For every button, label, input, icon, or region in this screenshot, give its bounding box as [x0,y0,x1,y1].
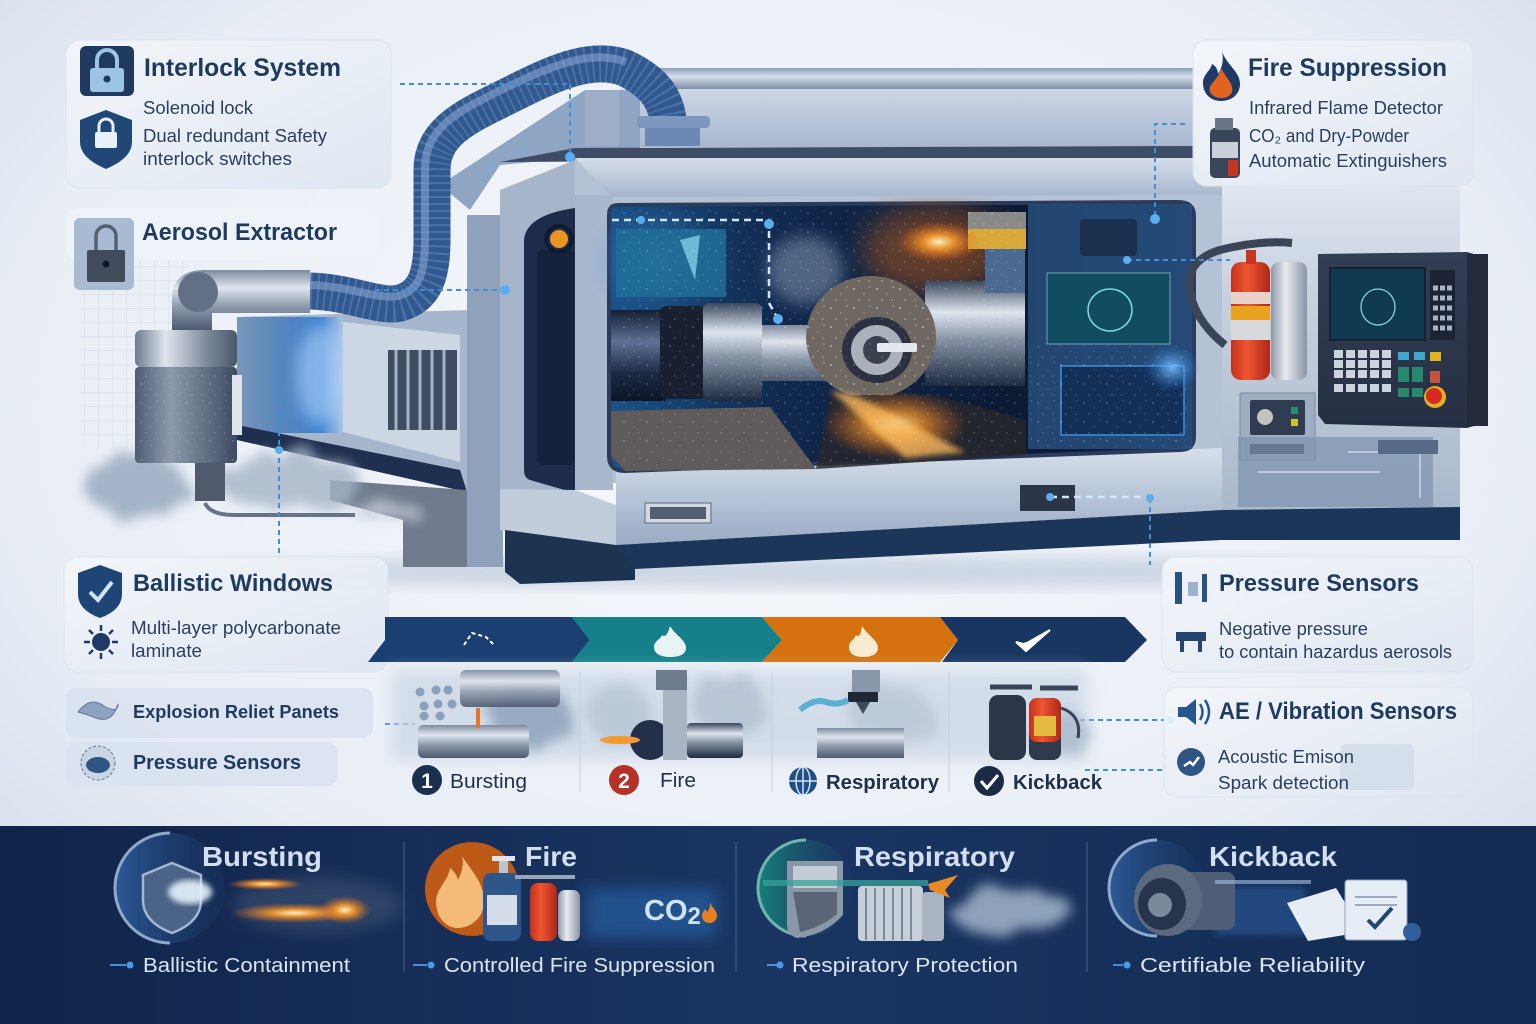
roof box [585,90,619,146]
extractor enclosure body [237,310,470,567]
arrow: dark navy [940,617,1147,662]
caption: Respiratory Protection [792,955,1018,977]
heading: Kickback [1209,841,1337,872]
machine [85,57,1488,588]
right cabinet [1215,186,1460,540]
label: fire [609,765,696,795]
icon: padlock [80,46,134,96]
shaft [762,325,840,381]
glow chart [585,888,717,938]
CO2 mark: CO [644,895,688,927]
icon: flame [1203,52,1240,101]
viewing window [585,200,1200,471]
rear shaft [925,281,1025,386]
lower sparks [823,391,967,459]
slanted roof [440,90,640,210]
smoke near extractor [85,453,421,522]
text: laminate: Multi-layer polycarbonate [131,618,341,638]
label: bursting: Bursting [450,771,527,793]
right glass panel [1028,204,1200,449]
text: negative pressure: to contain hazardus aerosols [1219,642,1452,662]
icon: shield check [78,565,122,618]
control panel [1318,252,1488,428]
upper spark [897,222,981,262]
icon: shield disc [115,833,225,943]
process arrows [368,617,1147,662]
panel: aerosol extractor [66,208,378,290]
icon: spindle disc [1109,840,1311,936]
heading: Bursting [202,841,322,872]
chuck [660,306,706,399]
silver cylinder [1271,262,1307,380]
bottom band [0,826,1536,1024]
caption: Certifiable Reliability [1140,955,1365,977]
heading: Aerosol Extractor [142,219,337,246]
spark streaks [227,877,403,933]
heading: Respiratory [854,841,1015,872]
dust cloud [767,236,843,304]
frame column [575,195,613,490]
text: negative pressure: Negative pressure [1219,619,1368,639]
label: kickback: Kickback [1013,772,1103,794]
icon: extinguishers [483,856,580,941]
panel: AE / vibration sensors [1164,687,1473,797]
icon: relief wave [78,702,118,719]
icon: extinguisher cylinder [1210,118,1240,178]
red extinguisher [1231,250,1270,380]
label: respiratory: Respiratory [826,772,940,794]
panel: explosion relief panels [66,688,373,738]
text: extinguishers: CO₂ and Dry-Powder [1249,126,1409,146]
lower front panel [616,448,1222,545]
grid backdrop behind extractor [80,258,190,448]
gauge box [1240,393,1315,460]
label: bursting: 1 [421,770,433,793]
hazard backdrop [392,670,1087,760]
grinding wheel [806,276,936,398]
icon: filter cartridge [858,875,958,941]
icon: manifold [1176,632,1206,652]
overhead head [968,212,1026,293]
text: acoustic emission: Spark detection [1218,773,1349,793]
flying particles [618,210,1024,468]
illustration: respiratory [800,670,904,758]
panel: fire suppression [1193,40,1473,186]
hazard row [392,670,1103,796]
heading: Fire [525,841,577,872]
arrow: teal [572,617,782,662]
front frame [575,158,1222,483]
caption: Controlled Fire Suppression [444,955,715,977]
rear housing [620,89,1200,147]
label: Explosion Reliet Panets [133,702,339,722]
floor shadow [200,556,1440,588]
bottom column: respiratory [758,840,1074,977]
arrow: orange [762,617,958,662]
label: kickback [974,766,1103,796]
corner block [500,489,616,545]
panel: pressure sensors left [66,742,338,786]
label: Pressure Sensors [133,752,301,774]
label: respiratory [789,767,940,795]
panel: ballistic windows [64,557,388,672]
text: solenoid lock: Solenoid lock [143,98,254,118]
icon: impact burst [84,625,118,659]
base plinth [616,507,1460,570]
CO2 mark: 2 [688,903,701,930]
window connector lines [612,220,1150,497]
work block [611,407,816,471]
icon: filter disc [758,840,928,938]
icon: flame disc [425,842,519,936]
label: bursting [412,765,527,795]
bottom column: fire [413,841,717,977]
icon: speaker waves [1178,699,1209,725]
icon: acoustic dial [1177,748,1205,776]
lower debris zone [816,395,1026,469]
panel: interlock system [66,40,391,188]
connector lines [279,84,1230,770]
heading: AE / Vibration Sensors [1219,698,1457,725]
text: extinguishers: Automatic Extinguishers [1249,151,1447,171]
heading: Fire Suppression [1248,54,1447,82]
text: infrared flame detector: Infrared Flame Detector [1249,98,1443,118]
orange spark cloud [863,206,1007,294]
panel: pressure sensors right [1162,557,1473,672]
icon: sensor bars [1175,572,1207,604]
icon: certificates [1287,880,1421,941]
bottom column: kickback [1109,840,1421,977]
corner foot [505,530,635,584]
extinguisher hose [1189,242,1292,345]
caption: Ballistic Containment [143,955,350,977]
name plate [645,503,711,523]
extractor canister [135,270,355,515]
lower glass schematic [1238,437,1438,507]
dark roof strip [500,146,1195,162]
icon: gauge [81,746,115,780]
extractor hose [310,57,668,304]
latch [1020,485,1075,511]
inset highlight [1340,744,1414,790]
label: fire: 2 [618,770,630,793]
hazard smoke [488,675,1090,757]
inset screen [616,229,726,297]
illustration: kickback extinguishers [989,687,1079,760]
text: acoustic emission: Acoustic Emison [1218,747,1354,767]
blue glow upper left [585,200,735,320]
heading: Ballistic Windows [133,570,333,597]
smoke [950,888,1074,936]
arrow: navy [368,617,590,662]
text: laminate: laminate [131,641,202,661]
icon: shield lock [80,110,132,169]
bottom column: bursting [110,833,403,977]
illustration: bursting [418,670,560,758]
illustration: fire [600,670,743,760]
top frame [575,158,1222,197]
rear housing top rail [640,68,1195,89]
spindle body [611,310,666,401]
text: interlock switches: interlock switches [143,149,292,169]
label: fire: Fire [660,770,696,792]
heading: Interlock System [144,54,341,82]
chrome collar [703,303,762,401]
heading: Pressure Sensors [1219,570,1419,597]
icon: small padlock [74,218,134,290]
CO2 mark [644,895,717,930]
left door [467,160,575,567]
connector nodes [275,152,1174,724]
hose collar [637,116,710,146]
text: interlock switches: Dual redundant Safety [143,126,327,146]
